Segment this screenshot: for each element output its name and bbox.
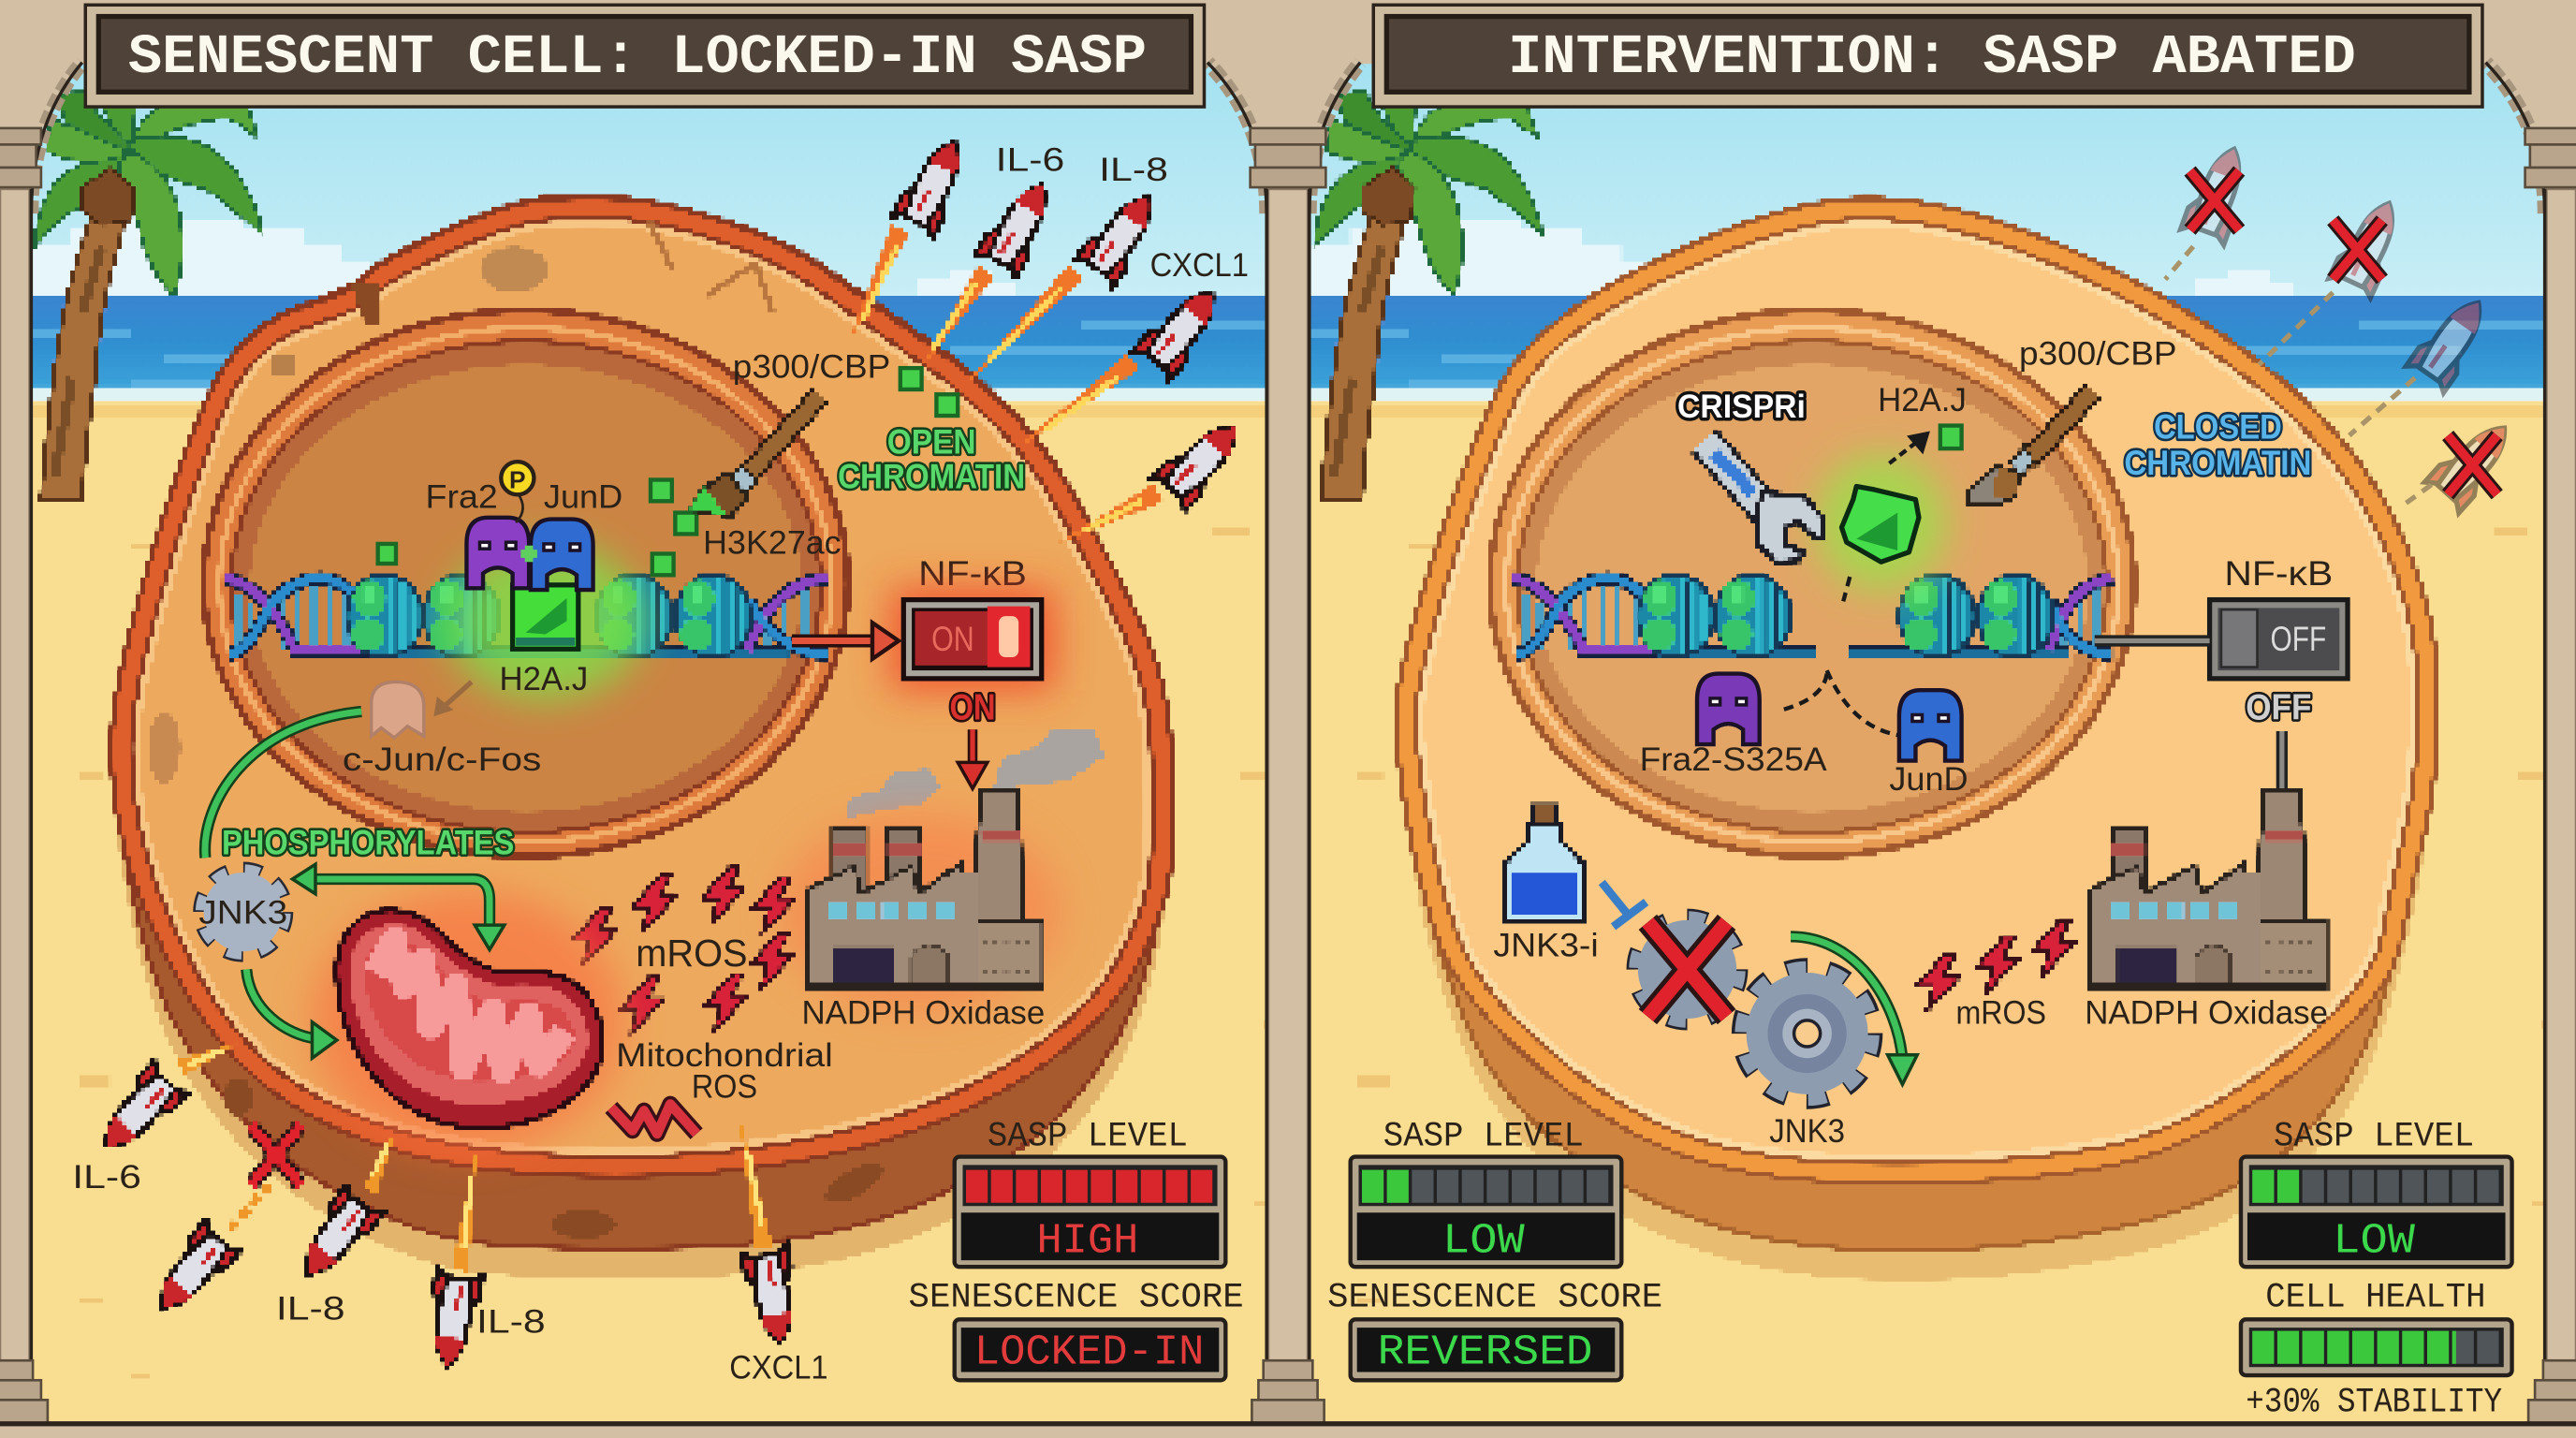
icon: DNA split [1513, 575, 2113, 657]
label: p300/CBP: p300/CBP [733, 349, 890, 386]
label: closed chromatin: CHROMATIN [2124, 444, 2311, 482]
gauge: cell health [2241, 1319, 2512, 1375]
label: mROS: mROS [1955, 994, 2046, 1031]
icon: JunD [1899, 690, 1962, 761]
heading: senescent cell [85, 5, 1204, 107]
icon: p300/CBP paintbrush [690, 396, 820, 516]
faded blocked rockets [2165, 141, 2522, 513]
label: Fra2-S325A: Fra2-S325A [1640, 741, 1827, 778]
icon: NF-kB switch off: OFF [2271, 620, 2326, 658]
heading: intervention: INTERVENTION: SASP ABATED [1508, 25, 2356, 89]
connector: DNA to switch [2095, 638, 2210, 644]
label: CRISPRi: CRISPRi [1677, 389, 1806, 425]
panel: intervention [1310, 66, 2574, 1438]
label: CXCL1 bottom: CXCL1 [729, 1350, 828, 1387]
label: NF-kB: NF-κB [2224, 554, 2333, 593]
label: SASP LEVEL right: SASP LEVEL [2274, 1117, 2474, 1156]
icon: mROS bolts [574, 868, 795, 1034]
label: SASP LEVEL: SASP LEVEL [988, 1117, 1188, 1156]
label: mROS: mROS [636, 932, 748, 975]
icon: mROS bolts [1917, 920, 2075, 1010]
panel: senescent cell [31, 66, 1296, 1438]
label: JunD: JunD [544, 478, 622, 515]
icon: NF-kB switch off [2210, 600, 2348, 679]
icon: NF-kB switch on [890, 588, 1055, 690]
arrow: blocked rotation [1791, 936, 1917, 1084]
gauge: SASP high [955, 1157, 1225, 1267]
icon: inhibited gear [1634, 917, 1740, 1022]
icon: JNK3 gear: JNK3 [198, 894, 287, 931]
label: c-Jun/c-Fos: c-Jun/c-Fos [343, 741, 541, 778]
icon: phospho tag [501, 462, 534, 494]
icon: p300/CBP paintbrush idle [1969, 391, 2093, 505]
icon: mitochondrion [312, 890, 624, 1153]
heading: senescent cell: SENESCENT CELL: LOCKED-IN SASP [128, 25, 1147, 89]
icon: c-Jun/c-Fos ghost [372, 682, 472, 738]
gauge: SASP low right: LOW [2333, 1216, 2416, 1265]
label: JNK3-i: JNK3-i [1493, 927, 1599, 963]
icon: inhibition bar [1602, 882, 1647, 927]
label: open chromatin: CHROMATIN [838, 457, 1025, 495]
beach scene [31, 66, 1296, 1438]
label: Fra2: Fra2 [426, 478, 498, 515]
label: IL-8 top: IL-8 [1099, 152, 1168, 188]
label: Mitochondrial ROS: ROS [692, 1068, 757, 1105]
label: NADPH Oxidase: NADPH Oxidase [2085, 994, 2328, 1031]
arrow: JNK3 to c-Jun [205, 712, 361, 858]
gauge: SASP low left: LOW [1442, 1216, 1525, 1265]
label: NF-kB: NF-κB [918, 554, 1027, 593]
arrow: H2A.J leaving [1782, 433, 1927, 736]
connector: switch to factory [2278, 731, 2285, 788]
icon: Fra2 and JunD dimer [466, 493, 593, 590]
label: p300/CBP: p300/CBP [2019, 336, 2177, 373]
label: IL-8 bottom second: IL-8 [476, 1303, 546, 1340]
label: H2A.J: H2A.J [500, 661, 588, 697]
gauge: reversed: REVERSED [1378, 1328, 1593, 1377]
icon: phospho tag: P [509, 465, 526, 493]
nucleus [1486, 307, 2137, 859]
icon: JNK3 gear [198, 869, 287, 955]
icon: DNA with nucleosomes [225, 575, 827, 657]
label: CELL HEALTH: CELL HEALTH [2265, 1278, 2485, 1317]
label: IL-6 top: IL-6 [996, 142, 1064, 179]
label: open chromatin: OPEN [887, 422, 976, 461]
arrow: NF-kB to factory [958, 729, 988, 788]
label: OFF: OFF [2246, 688, 2311, 728]
beach scene [1310, 66, 2574, 1438]
arrow: DNA to NF-kB [792, 623, 899, 659]
label: open chromatin [838, 422, 1025, 495]
icon: H2A.J histone [446, 542, 644, 700]
label: ON: ON [949, 688, 996, 728]
label: PHOSPHORYLATES: PHOSPHORYLATES [222, 824, 514, 862]
icon: CRISPRi wrench [1704, 440, 1822, 562]
gauge: reversed [1351, 1319, 1621, 1380]
label: IL-8 bottom: IL-8 [276, 1290, 345, 1327]
label: +30% STABILITY: +30% STABILITY [2246, 1384, 2502, 1423]
label: closed chromatin [2124, 408, 2311, 482]
cell body [1400, 198, 2433, 1280]
icon: NF-kB switch on: ON [931, 620, 974, 658]
label: IL-6 bottom: IL-6 [72, 1159, 141, 1196]
icon: acetyl marks [378, 368, 958, 575]
label: SENESCENCE SCORE: SENESCENCE SCORE [1327, 1278, 1662, 1317]
icon: ROS squiggle [611, 1104, 696, 1134]
icon: Fra2-S325A [1697, 674, 1760, 744]
gauge: SASP high: HIGH [1036, 1216, 1138, 1265]
label: NADPH Oxidase: NADPH Oxidase [801, 994, 1045, 1031]
icon: NADPH Oxidase factory [805, 792, 1045, 990]
rockets outbound bottom [91, 1043, 803, 1368]
cell body [113, 197, 1172, 1278]
glow behind factory [781, 814, 1060, 1010]
label: Mitochondrial ROS [616, 1037, 833, 1105]
heading: intervention [1373, 5, 2482, 107]
label: Mitochondrial ROS: Mitochondrial [616, 1037, 833, 1074]
gauge: locked-in: LOCKED-IN [974, 1328, 1204, 1377]
gauge: locked-in [955, 1319, 1225, 1380]
label: JNK3: JNK3 [1769, 1113, 1845, 1150]
gauge: SASP low left [1351, 1157, 1621, 1267]
label: closed chromatin: CLOSED [2154, 408, 2282, 447]
icon: smoke [846, 728, 1104, 818]
rockets outbound top [851, 133, 1251, 542]
nucleus [200, 307, 851, 859]
icon: free H2A.J mark [1940, 426, 1962, 448]
icon: JNK3-i bottle [1505, 805, 1584, 920]
icon: JNK3 gear [1741, 968, 1873, 1099]
arrow: JNK3 mito feedback [292, 864, 505, 949]
icon: evicted H2A.J histone [1815, 453, 1947, 592]
arrow: JNK3 to mitochondrion [246, 970, 337, 1058]
label: H2A.J: H2A.J [1878, 382, 1967, 418]
label: SENESCENCE SCORE: SENESCENCE SCORE [909, 1278, 1244, 1317]
label: H3K27ac: H3K27ac [703, 524, 842, 561]
icon: NADPH Oxidase factory [2088, 792, 2328, 990]
gauge: SASP low right [2241, 1157, 2512, 1267]
label: CXCL1 top: CXCL1 [1150, 247, 1249, 284]
label: JunD: JunD [1889, 761, 1969, 798]
label: SASP LEVEL left: SASP LEVEL [1383, 1117, 1584, 1156]
